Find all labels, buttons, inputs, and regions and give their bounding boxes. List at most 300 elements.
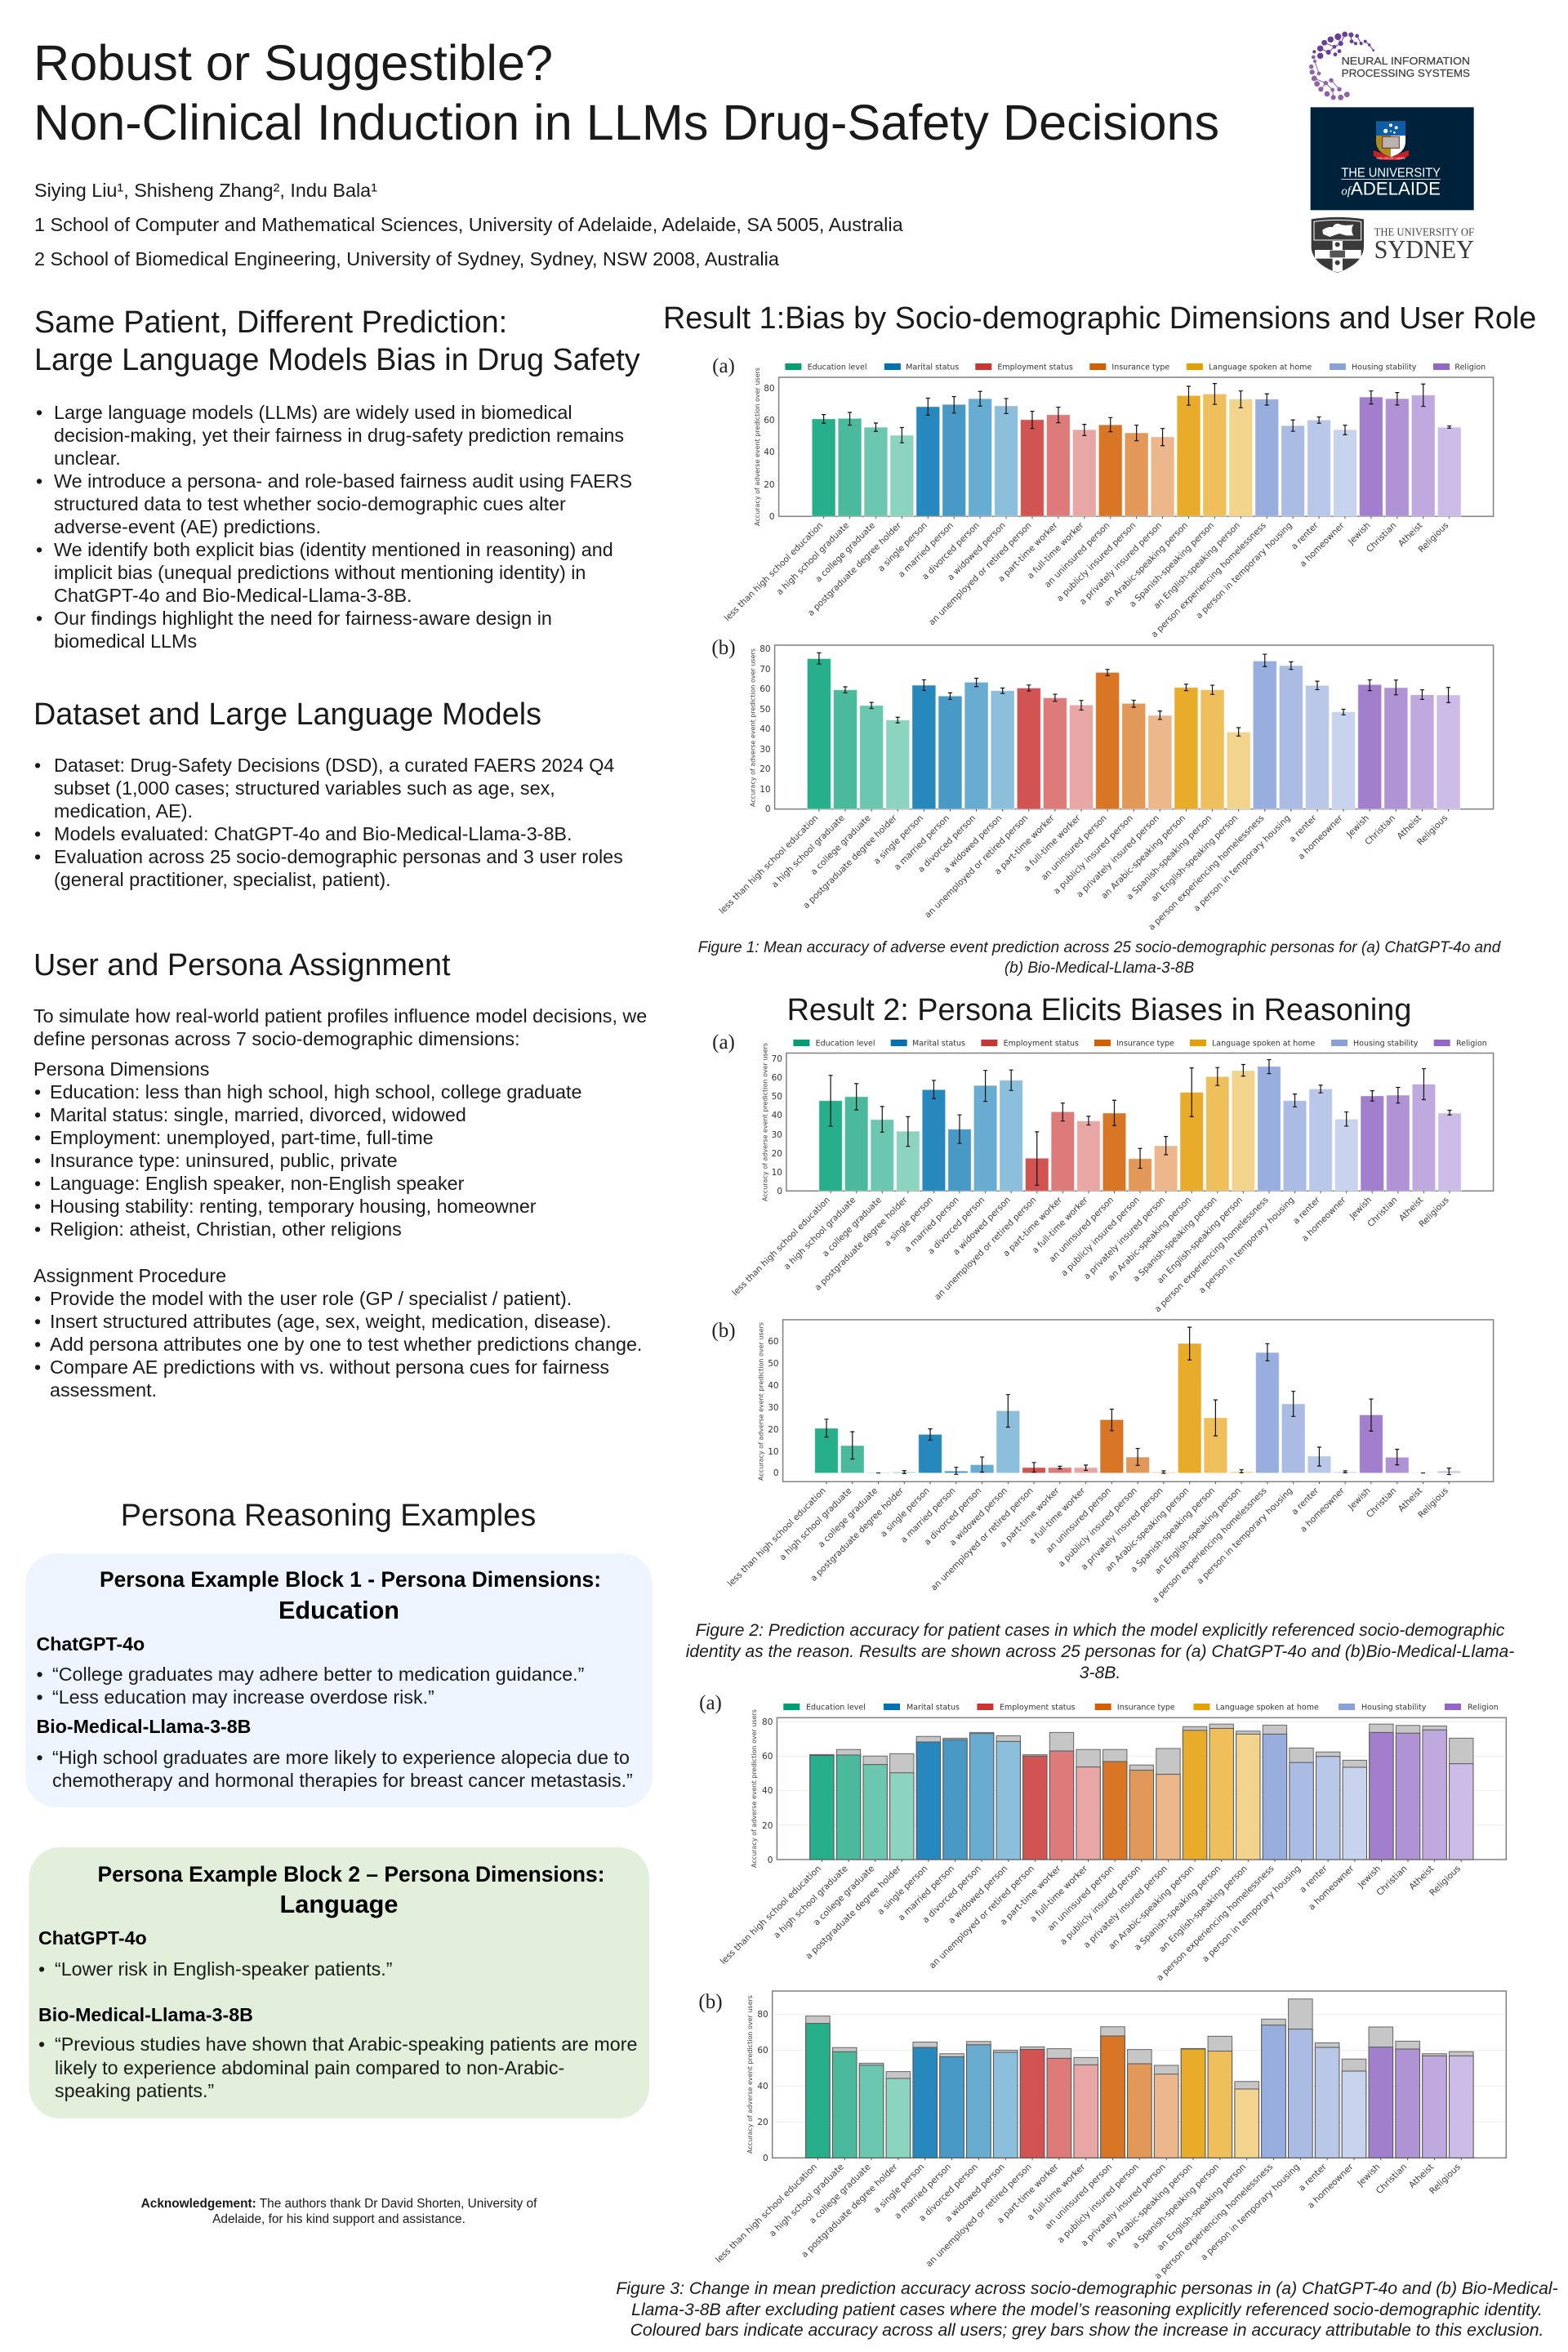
- caption: Figure 1: Figure 1: Mean accuracy of adverse event prediction across 25 socio-demographic personas for (a) ChatGPT-4o and: [698, 939, 1502, 956]
- text block: persona intro: define personas across 7 socio-demographic dimensions:: [33, 1028, 520, 1049]
- x-axis labels: a postgraduate degree holder: [808, 1486, 906, 1584]
- chart: Figure 2b Bio-Medical-Llama explicit reasoning: 60: [768, 1337, 779, 1347]
- logo: University of Sydney: [1312, 217, 1474, 273]
- chart: Figure 2a ChatGPT-4o explicit reasoning: 0: [777, 1187, 782, 1196]
- x-axis labels: a widowed person: [946, 520, 1008, 582]
- chart: Figure 2a ChatGPT-4o explicit reasoning: 50: [772, 1092, 782, 1102]
- x-axis labels: Atheist: [1397, 1195, 1425, 1223]
- text block: introduction bullets: unclear.: [54, 448, 121, 469]
- x-axis labels: [730, 1195, 1451, 1314]
- x-axis labels: an Arabic-speaking person: [1103, 1486, 1191, 1574]
- x-axis labels: less than high school education: [713, 2162, 819, 2265]
- legend: Employment status: [1004, 1039, 1079, 1049]
- x-axis labels: Atheist: [1396, 1486, 1424, 1514]
- text block: introduction bullets: We introduce a persona- and role-based fairness audit using FAERS: [54, 470, 632, 492]
- x-axis labels: less than high school education: [726, 1486, 828, 1588]
- chart: Figure 3b Bio-Medical-Llama change in accuracy: 80: [757, 2010, 768, 2020]
- x-axis labels: a divorced person: [926, 1195, 987, 1257]
- chart: Figure 2b Bio-Medical-Llama explicit reasoning: 0: [773, 1468, 779, 1478]
- x-axis labels: a full-time worker: [1022, 813, 1083, 874]
- x-axis labels: a postgraduate degree holder: [806, 520, 903, 618]
- x-axis labels: a divorced person: [920, 520, 982, 581]
- x-axis labels: a renter: [1287, 813, 1319, 844]
- text block: persona intro: To simulate how real-world patient profiles influence model decisions, we: [33, 1005, 647, 1027]
- logo: University of Sydney: SYDNEY: [1374, 234, 1474, 264]
- chart: Figure 3a ChatGPT-4o change in accuracy: 60: [762, 1752, 773, 1762]
- legend: Marital status: [906, 1704, 960, 1712]
- x-axis labels: a divorced person: [920, 1864, 983, 1925]
- x-axis labels: a widowed person: [948, 1486, 1009, 1548]
- x-axis labels: a homeowner: [1305, 2161, 1356, 2211]
- chart: Figure 2a ChatGPT-4o explicit reasoning: 30: [772, 1130, 782, 1140]
- x-axis labels: an Arabic-speaking person: [1107, 1195, 1193, 1283]
- text block: assignment procedure: Provide the model with the user role (GP / specialist / patient).: [50, 1288, 572, 1309]
- text block: introduction bullets: adverse-event (AE) predictions.: [54, 516, 321, 537]
- logo: NeurIPS: PROCESSING SYSTEMS: [1342, 67, 1470, 79]
- x-axis labels: a married person: [893, 813, 951, 872]
- x-axis labels: Jewish: [1356, 1864, 1383, 1891]
- caption: Figure 3: Figure 3: Change in mean prediction accuracy across socio-demographic personas in (a) ChatGPT-4o and (b) Bio-Medical-: [616, 2279, 1558, 2298]
- x-axis labels: a high school graduate: [767, 2162, 846, 2238]
- panel: persona example block 1: •: [36, 1686, 43, 1708]
- x-axis labels: an unemployed or retired person: [933, 1195, 1038, 1302]
- caption: Figure 2: 3-8B.: [1080, 1664, 1120, 1682]
- text block: assignment procedure: Add persona attributes one by one to test whether predictions change.: [50, 1334, 642, 1355]
- text block: persona dimensions: Persona Dimensions: [33, 1058, 209, 1080]
- x-axis labels: an unemployed or retired person: [927, 520, 1034, 627]
- authors and affiliations: 2 School of Biomedical Engineering, University of Sydney, Sydney, NSW 2008, Australia: [34, 248, 780, 270]
- text block: dataset bullets: Evaluation across 25 socio-demographic personas and 3 user roles: [54, 846, 623, 867]
- x-axis labels: a part-time worker: [999, 1864, 1063, 1927]
- x-axis labels: a full-time worker: [1028, 1864, 1090, 1924]
- heading: Result 2: Result 2: Persona Elicits Biases in Reasoning: [787, 993, 1411, 1027]
- logos: [1309, 32, 1474, 273]
- x-axis labels: an Arabic-speaking person: [1099, 813, 1187, 901]
- x-axis labels: a publicly insured person: [1059, 1195, 1142, 1278]
- x-axis labels: an English-speaking person: [1156, 1195, 1245, 1285]
- x-axis labels: a person experiencing homelessness: [1152, 2162, 1276, 2281]
- chart: Figure 1b Bio-Medical-Llama accuracy: (b): [711, 637, 736, 659]
- text block: introduction bullets: We identify both explicit bias (identity mentioned in reasoning) and: [54, 539, 613, 560]
- x-axis labels: an Arabic-speaking person: [1107, 1864, 1196, 1952]
- heading: Dataset and Large Language Models: Dataset and Large Language Models: [33, 697, 541, 732]
- heading: Same Patient, Different Prediction: [34, 305, 640, 377]
- chart: Figure 1a ChatGPT-4o accuracy: [712, 355, 1494, 639]
- panel: persona example block 1: “High school graduates are more likely to experience alopecia due to: [52, 1747, 630, 1768]
- x-axis labels: a publicly insured person: [1052, 813, 1135, 897]
- x-axis labels: a person in temporary housing: [1200, 1864, 1303, 1964]
- logo: University of Adelaide: [1311, 107, 1474, 210]
- text block: assignment procedure: [33, 1265, 642, 1401]
- chart: Figure 2b Bio-Medical-Llama explicit reasoning: Accuracy of adverse event prediction over users: [757, 1322, 764, 1481]
- logo: University of Adelaide: SUB CRUCE LUMEN: [1376, 157, 1405, 160]
- text block: persona dimensions: •: [34, 1218, 41, 1240]
- x-axis labels: a privately insured person: [1082, 1195, 1167, 1281]
- title: Non-Clinical Induction in LLMs Drug-Safety Decisions: [33, 95, 1219, 150]
- text block: dataset bullets: Models evaluated: ChatGPT-4o and Bio-Medical-Llama-3-8B.: [54, 823, 572, 844]
- x-axis labels: a full-time worker: [1027, 1486, 1088, 1546]
- x-axis labels: a widowed person: [947, 1864, 1009, 1926]
- text block: introduction bullets: •: [36, 539, 42, 560]
- text block: assignment procedure: Assignment Procedure: [33, 1265, 226, 1286]
- legend: Language spoken at home: [1212, 1039, 1315, 1049]
- x-axis labels: an uninsured person: [1043, 2162, 1114, 2231]
- x-axis labels: Christian: [1365, 1486, 1398, 1520]
- acknowledgement: Acknowledgement: The authors thank Dr David Shorten, University of: [141, 2197, 537, 2211]
- chart: Figure 1a ChatGPT-4o accuracy: (a): [712, 355, 735, 377]
- heading: Result 1: Result 1:Bias by Socio-demographic Dimensions and User Role: [663, 301, 1536, 336]
- authors and affiliations: Siying Liu¹, Shisheng Zhang², Indu Bala¹: [34, 180, 377, 201]
- chart: Figure 2a ChatGPT-4o explicit reasoning: Accuracy of adverse event prediction over users: [761, 1043, 768, 1201]
- chart: Figure 2a ChatGPT-4o explicit reasoning: 10: [772, 1168, 782, 1178]
- caption: Figure 2: identity as the reason. Results are shown across 25 personas for (a) ChatGPT-4o and (b)Bio-Medical-Llama-: [686, 1642, 1514, 1661]
- text block: introduction bullets: ChatGPT-4o and Bio-Medical-Llama-3-8B.: [54, 585, 412, 606]
- x-axis labels: a person experiencing homelessness: [1149, 520, 1268, 639]
- x-axis labels: an unemployed or retired person: [924, 2162, 1034, 2269]
- chart: Figure 2b Bio-Medical-Llama explicit reasoning: 50: [768, 1359, 779, 1369]
- chart: Figure 3a ChatGPT-4o change in accuracy: [699, 1692, 1506, 1983]
- text block: dataset bullets: Dataset: Drug-Safety Decisions (DSD), a curated FAERS 2024 Q4: [54, 755, 614, 776]
- chart: Figure 3b Bio-Medical-Llama change in accuracy: 40: [757, 2082, 768, 2091]
- x-axis labels: a person experiencing homelessness: [1151, 1486, 1269, 1605]
- x-axis labels: Religious: [1417, 1195, 1451, 1229]
- x-axis labels: a single person: [872, 813, 925, 866]
- x-axis labels: an unemployed or retired person: [929, 1486, 1036, 1592]
- x-axis labels: a part-time worker: [1001, 1195, 1064, 1258]
- chart: Figure 1b Bio-Medical-Llama accuracy: [711, 637, 1494, 933]
- text block: introduction bullets: Our findings highlight the need for fairness-aware design in: [54, 608, 552, 629]
- panel: persona example block 2: Language: [279, 1890, 399, 1918]
- x-axis labels: Christian: [1363, 813, 1397, 847]
- heading: Persona Reasoning Examples: Persona Reasoning Examples: [121, 1499, 536, 1533]
- chart: Figure 1b Bio-Medical-Llama accuracy: Accuracy of adverse event prediction over users: [749, 648, 756, 807]
- chart: Figure 3b Bio-Medical-Llama change in accuracy: 20: [757, 2118, 768, 2127]
- x-axis labels: a widowed person: [942, 813, 1004, 875]
- legend: Education level: [808, 363, 867, 372]
- x-axis labels: a Spanish-speaking person: [1133, 1864, 1223, 1953]
- x-axis labels: a single person: [871, 2162, 926, 2216]
- panel: persona example block 1: Education: [278, 1596, 399, 1624]
- chart: Figure 1a ChatGPT-4o accuracy: 80: [764, 384, 775, 394]
- text block: introduction bullets: Large language models (LLMs) are widely used in biomedical: [54, 402, 572, 423]
- x-axis labels: a homeowner: [1300, 1195, 1348, 1244]
- x-axis labels: a college graduate: [821, 1195, 884, 1259]
- acknowledgement: [141, 2197, 537, 2226]
- panel: persona example block 2: •: [38, 1958, 45, 1980]
- x-axis labels: a part-time worker: [996, 520, 1060, 584]
- panel: persona example block 1: “Less education may increase overdose risk.”: [52, 1686, 434, 1708]
- text block: assignment procedure: assessment.: [50, 1379, 157, 1401]
- x-axis labels: [726, 1486, 1450, 1605]
- x-axis labels: a postgraduate degree holder: [799, 2161, 900, 2260]
- x-axis labels: a full-time worker: [1026, 520, 1086, 581]
- legend: Education level: [806, 1704, 866, 1712]
- x-axis labels: a high school graduate: [782, 1195, 858, 1272]
- x-axis labels: a renter: [1291, 1195, 1322, 1227]
- panel: persona example block 2: speaking patients.”: [55, 2080, 214, 2101]
- x-axis labels: Jewish: [1348, 1195, 1374, 1222]
- x-axis labels: a married person: [892, 2162, 953, 2221]
- chart: Figure 2a ChatGPT-4o explicit reasoning: 20: [772, 1149, 782, 1159]
- chart: Figure 1a ChatGPT-4o accuracy: 20: [764, 480, 775, 490]
- text block: persona dimensions: Insurance type: uninsured, public, private: [50, 1150, 398, 1171]
- chart: Figure 1b Bio-Medical-Llama accuracy: 0: [765, 804, 771, 814]
- authors and affiliations: [34, 180, 904, 270]
- x-axis labels: a person experiencing homelessness: [1153, 1195, 1271, 1314]
- x-axis labels: a single person: [875, 1864, 930, 1917]
- text block: introduction bullets: structured data to test whether socio-demographic cues alter: [54, 493, 566, 514]
- x-axis labels: a person experiencing homelessness: [1147, 813, 1266, 933]
- x-axis labels: a Spanish-speaking person: [1125, 813, 1214, 902]
- panel: persona example block 2: likely to experience abdominal pain compared to non-Arabic-: [55, 2057, 564, 2078]
- chart: Figure 3b Bio-Medical-Llama change in accuracy: (b): [698, 1991, 723, 2013]
- x-axis labels: Jewish: [1344, 813, 1371, 840]
- logo: NeurIPS: NEURAL INFORMATION: [1342, 55, 1470, 67]
- chart: Figure 1b Bio-Medical-Llama accuracy: 60: [760, 684, 771, 694]
- text block: introduction bullets: •: [36, 402, 42, 423]
- x-axis labels: a single person: [879, 1486, 932, 1539]
- x-axis labels: an Arabic-speaking person: [1104, 2162, 1195, 2250]
- chart: Figure 2a ChatGPT-4o explicit reasoning: 70: [772, 1054, 782, 1064]
- text block: persona intro: [33, 1005, 647, 1049]
- text block: persona dimensions: [33, 1058, 581, 1240]
- legend: Housing stability: [1361, 1704, 1427, 1712]
- chart: Figure 1a ChatGPT-4o accuracy: 60: [764, 416, 775, 425]
- x-axis labels: a person in temporary housing: [1197, 1195, 1296, 1295]
- text block: dataset bullets: medication, AE).: [54, 800, 193, 822]
- x-axis labels: Religious: [1417, 520, 1450, 555]
- logo: University of Adelaide: THE UNIVERSITY: [1341, 167, 1441, 180]
- legend: Employment status: [997, 363, 1073, 372]
- x-axis labels: a renter: [1296, 2161, 1329, 2193]
- x-axis labels: a person in temporary housing: [1194, 520, 1294, 621]
- x-axis labels: an English-speaking person: [1157, 1864, 1250, 1954]
- x-axis labels: Christian: [1365, 520, 1398, 555]
- x-axis labels: a postgraduate degree holder: [801, 813, 899, 911]
- x-axis labels: a privately insured person: [1079, 2162, 1168, 2248]
- caption: Figure 2: Figure 2: Prediction accuracy for patient cases in which the model explicitly referenced socio-demographic: [696, 1621, 1505, 1640]
- x-axis labels: Jewish: [1354, 2162, 1383, 2189]
- x-axis labels: a postgraduate degree holder: [804, 1864, 903, 1962]
- x-axis labels: a postgraduate degree holder: [813, 1195, 910, 1293]
- x-axis labels: a part-time worker: [998, 1486, 1062, 1549]
- x-axis labels: a renter: [1298, 1864, 1330, 1895]
- text block: assignment procedure: •: [34, 1311, 41, 1332]
- caption: Figure 3: Llama-3-8B after excluding patient cases where the model’s reasoning explicitly referenced socio-demographic identity.: [631, 2301, 1543, 2319]
- text block: persona dimensions: •: [34, 1173, 41, 1194]
- x-axis labels: a college graduate: [812, 1864, 876, 1927]
- chart: Figure 3b Bio-Medical-Llama change in accuracy: 60: [757, 2046, 768, 2056]
- text block: assignment procedure: Compare AE predictions with vs. without persona cues for fairness: [50, 1356, 609, 1378]
- chart: Figure 1b Bio-Medical-Llama accuracy: 50: [760, 705, 771, 715]
- x-axis labels: a privately insured person: [1081, 1864, 1169, 1950]
- panel: persona example block 1: Persona Example Block 1 - Persona Dimensions:: [100, 1567, 601, 1592]
- x-axis labels: a divorced person: [923, 1486, 983, 1548]
- panel: persona example block 1: chemotherapy and hormonal therapies for breast cancer metastasis.”: [52, 1770, 633, 1791]
- acknowledgement: Adelaide, for his kind support and assistance.: [212, 2212, 466, 2226]
- chart: Figure 2a ChatGPT-4o explicit reasoning: 60: [772, 1073, 782, 1083]
- x-axis labels: a Spanish-speaking person: [1130, 2162, 1222, 2251]
- text block: persona dimensions: •: [34, 1081, 41, 1102]
- x-axis labels: a homeowner: [1298, 520, 1347, 569]
- title: Robust or Suggestible?: [33, 35, 553, 91]
- chart: Figure 3a ChatGPT-4o change in accuracy: Accuracy of adverse event prediction over users: [751, 1709, 758, 1868]
- chart: Figure 2b Bio-Medical-Llama explicit reasoning: 30: [768, 1403, 779, 1413]
- chart: Figure 2a ChatGPT-4o explicit reasoning: 40: [772, 1111, 782, 1120]
- authors and affiliations: 1 School of Computer and Mathematical Sciences, University of Adelaide, Adelaide, SA 5005, Australia: [34, 214, 904, 235]
- caption: Figure 3: Coloured bars indicate accuracy across all users; grey bars show the increase in accuracy attributable to this exclusion.: [630, 2321, 1544, 2340]
- x-axis labels: an unemployed or retired person: [923, 813, 1030, 920]
- x-axis labels: [717, 813, 1450, 933]
- x-axis labels: a college graduate: [808, 813, 873, 877]
- x-axis labels: a high school graduate: [775, 520, 851, 597]
- x-axis labels: a divorced person: [916, 813, 978, 875]
- x-axis labels: a married person: [899, 1486, 957, 1545]
- x-axis labels: a Spanish-speaking person: [1128, 520, 1216, 609]
- x-axis labels: Atheist: [1406, 2162, 1436, 2190]
- chart: Figure 2b Bio-Medical-Llama explicit reasoning: (b): [711, 1320, 736, 1342]
- x-axis labels: a full-time worker: [1025, 2161, 1088, 2222]
- x-axis labels: a high school graduate: [772, 1864, 850, 1940]
- legend: Housing stability: [1352, 363, 1417, 372]
- text block: introduction bullets: [36, 402, 632, 652]
- x-axis labels: an uninsured person: [1047, 1195, 1116, 1264]
- x-axis labels: a renter: [1290, 520, 1321, 551]
- legend: Insurance type: [1111, 363, 1169, 372]
- text block: assignment procedure: •: [34, 1356, 41, 1378]
- panel: persona example block 2: [29, 1847, 649, 2118]
- caption: Figure 2: [686, 1621, 1514, 1682]
- panel: persona example block 2: “Lower risk in English-speaker patients.”: [55, 1958, 393, 1980]
- legend: Education level: [816, 1039, 875, 1049]
- x-axis labels: Jewish: [1346, 520, 1373, 547]
- x-axis labels: a married person: [897, 1864, 956, 1922]
- x-axis labels: Christian: [1374, 2162, 1409, 2196]
- chart: Figure 2a ChatGPT-4o explicit reasoning: [712, 1031, 1494, 1314]
- text block: assignment procedure: Insert structured attributes (age, sex, weight, medication, disease).: [50, 1311, 612, 1332]
- text block: persona dimensions: •: [34, 1127, 41, 1148]
- panel: persona example block 2: •: [38, 2034, 45, 2055]
- x-axis labels: a homeowner: [1298, 1486, 1347, 1535]
- x-axis labels: an uninsured person: [1040, 813, 1109, 883]
- legend: Employment status: [1000, 1704, 1075, 1712]
- x-axis labels: a married person: [902, 1195, 961, 1254]
- x-axis labels: a privately insured person: [1080, 1486, 1165, 1572]
- text block: introduction bullets: •: [36, 470, 42, 492]
- legend: [793, 1039, 1487, 1049]
- caption: Figure 1: [698, 939, 1502, 977]
- legend: Language spoken at home: [1216, 1704, 1319, 1712]
- legend: Religion: [1456, 1039, 1487, 1049]
- legend: Marital status: [912, 1039, 965, 1049]
- x-axis labels: Atheist: [1395, 813, 1423, 841]
- panel: persona example block 2: “Previous studies have shown that Arabic-speaking patients are more: [55, 2034, 637, 2055]
- x-axis labels: a privately insured person: [1075, 813, 1161, 899]
- legend: Marital status: [906, 363, 959, 372]
- caption: Figure 1: (b) Bio-Medical-Llama-3-8B: [1004, 960, 1194, 977]
- x-axis labels: a high school graduate: [777, 1486, 853, 1562]
- x-axis labels: less than high school education: [717, 813, 821, 916]
- text block: persona dimensions: Religion: atheist, Christian, other religions: [50, 1218, 402, 1240]
- x-axis labels: Religious: [1416, 1486, 1450, 1520]
- panel: persona example block 2: ChatGPT-4o: [38, 1927, 147, 1949]
- x-axis labels: a full-time worker: [1031, 1195, 1090, 1255]
- x-axis labels: a person in temporary housing: [1198, 2162, 1302, 2262]
- x-axis labels: a privately insured person: [1078, 520, 1164, 607]
- x-axis labels: a person in temporary housing: [1195, 1486, 1294, 1586]
- chart: Figure 2b Bio-Medical-Llama explicit reasoning: 20: [768, 1425, 779, 1435]
- text block: persona dimensions: Language: English speaker, non-English speaker: [50, 1173, 465, 1194]
- x-axis labels: an English-speaking person: [1153, 1486, 1243, 1576]
- panel: persona example block 2: Persona Example Block 2 – Persona Dimensions:: [98, 1862, 604, 1886]
- chart: Figure 3a ChatGPT-4o change in accuracy: 80: [762, 1717, 773, 1727]
- x-axis labels: a renter: [1290, 1486, 1321, 1517]
- panel: persona example block 1: •: [36, 1664, 43, 1685]
- chart: Figure 1a ChatGPT-4o accuracy: Accuracy of adverse event prediction over users: [754, 368, 761, 526]
- x-axis labels: Religious: [1415, 813, 1450, 848]
- x-axis labels: Jewish: [1346, 1486, 1373, 1512]
- heading: Same Patient, Different Prediction: Same Patient, Different Prediction:: [34, 305, 507, 340]
- x-axis labels: a part-time worker: [995, 2161, 1061, 2225]
- text block: dataset bullets: •: [34, 755, 41, 776]
- chart: Figure 2a ChatGPT-4o explicit reasoning: (a): [712, 1031, 735, 1054]
- text block: introduction bullets: •: [36, 608, 42, 629]
- chart: Figure 1b Bio-Medical-Llama accuracy: 10: [760, 785, 771, 795]
- chart: Figure 1a ChatGPT-4o accuracy: 0: [769, 512, 775, 522]
- x-axis labels: a college graduate: [817, 1486, 880, 1550]
- x-axis labels: a widowed person: [942, 2162, 1007, 2224]
- text block: dataset bullets: •: [34, 823, 41, 844]
- text block: assignment procedure: •: [34, 1334, 41, 1355]
- text block: dataset bullets: •: [34, 846, 41, 867]
- x-axis labels: an English-speaking person: [1149, 813, 1240, 904]
- caption: Figure 3: [616, 2279, 1558, 2340]
- x-axis labels: a single person: [876, 520, 929, 574]
- chart: Figure 1b Bio-Medical-Llama accuracy: 70: [760, 665, 771, 675]
- x-axis labels: a college graduate: [813, 520, 877, 584]
- logo: NeurIPS: [1309, 32, 1470, 100]
- panel: persona example block 1: “College graduates may adhere better to medication guidance.”: [52, 1664, 584, 1685]
- chart: Figure 3a ChatGPT-4o change in accuracy: (a): [699, 1692, 722, 1714]
- legend: [783, 1704, 1499, 1712]
- chart: Figure 3a ChatGPT-4o change in accuracy: 40: [762, 1786, 773, 1796]
- panel: persona example block 1: Bio-Medical-Llama-3-8B: [36, 1716, 251, 1737]
- x-axis labels: Christian: [1374, 1864, 1410, 1898]
- legend: Language spoken at home: [1209, 363, 1312, 372]
- x-axis labels: a publicly insured person: [1057, 1486, 1139, 1569]
- panel: persona example block 1: ChatGPT-4o: [36, 1633, 145, 1655]
- text block: persona dimensions: •: [34, 1150, 41, 1171]
- text block: introduction bullets: biomedical LLMs: [54, 630, 197, 652]
- chart: Figure 2b Bio-Medical-Llama explicit reasoning: 40: [768, 1381, 779, 1391]
- chart: Figure 1b Bio-Medical-Llama accuracy: 40: [760, 724, 771, 734]
- panel: persona example block 1: •: [36, 1747, 43, 1768]
- text block: persona dimensions: Employment: unemployed, part-time, full-time: [50, 1127, 434, 1148]
- x-axis labels: an uninsured person: [1043, 520, 1111, 590]
- x-axis labels: a widowed person: [951, 1195, 1013, 1257]
- x-axis labels: Atheist: [1407, 1864, 1436, 1892]
- x-axis labels: a person experiencing homelessness: [1155, 1864, 1276, 1983]
- legend: Housing stability: [1353, 1039, 1419, 1049]
- chart: Figure 3b Bio-Medical-Llama change in accuracy: [698, 1991, 1506, 2281]
- text block: persona dimensions: •: [34, 1196, 41, 1217]
- x-axis labels: [719, 1864, 1463, 1983]
- x-axis labels: an Arabic-speaking person: [1102, 520, 1190, 608]
- legend: Religion: [1454, 363, 1486, 372]
- chart: Figure 1b Bio-Medical-Llama accuracy: 30: [760, 745, 771, 755]
- text block: introduction bullets: implicit bias (unequal predictions without mentioning identity) in: [54, 562, 586, 583]
- x-axis labels: Christian: [1365, 1195, 1400, 1229]
